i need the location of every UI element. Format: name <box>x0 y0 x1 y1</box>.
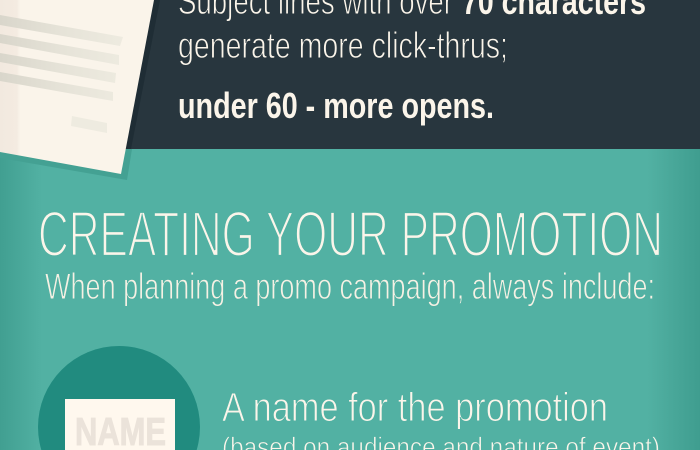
icon: name card <box>38 346 200 450</box>
stat text block: generate more click-thrus; <box>178 25 508 66</box>
teal background <box>0 149 700 450</box>
paper shadow on teal <box>0 149 132 180</box>
item title: A name for the promotion <box>222 384 608 430</box>
paper shadow <box>0 0 160 149</box>
icon: document <box>0 0 154 174</box>
dark panel <box>0 0 700 149</box>
stat text block <box>178 0 646 126</box>
stat text block: under 60 - more opens. <box>178 85 494 126</box>
